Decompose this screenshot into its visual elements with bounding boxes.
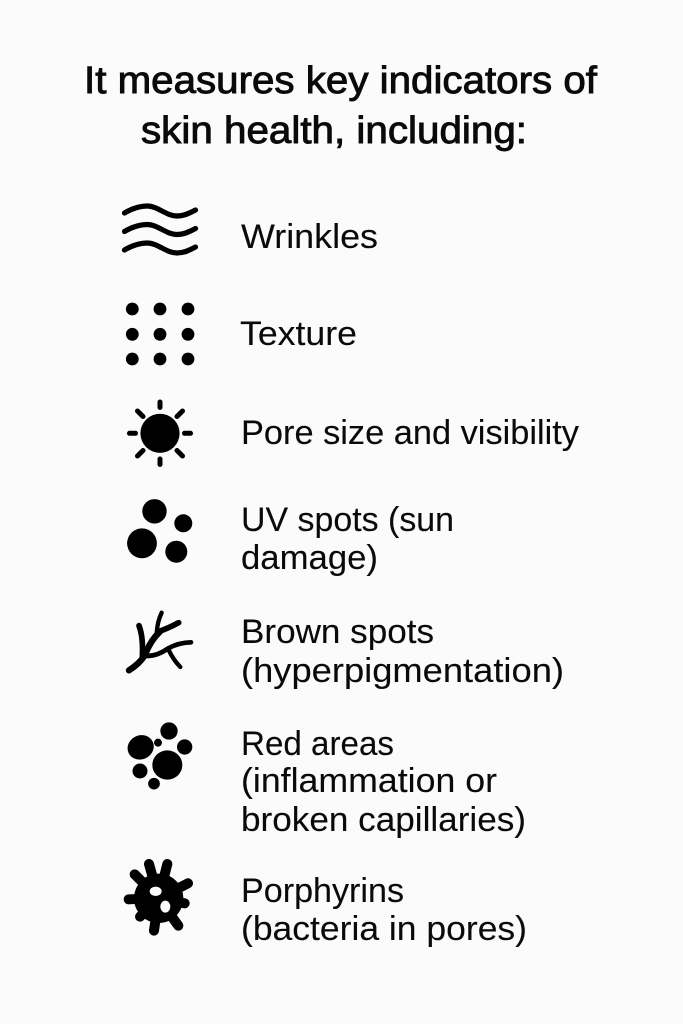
icon: wavy lines bbox=[124, 206, 196, 253]
item: brown spots: (hyperpigmentation) bbox=[241, 652, 564, 690]
item: brown spots bbox=[129, 613, 564, 690]
item: texture bbox=[126, 303, 357, 365]
title: It measures key indicators of bbox=[84, 60, 597, 102]
icon: sun bbox=[130, 402, 190, 464]
item: red areas bbox=[124, 722, 526, 839]
item: wrinkles: Wrinkles bbox=[241, 218, 378, 256]
icon: cluster of blobs bbox=[124, 722, 192, 789]
item: uv spots bbox=[127, 499, 454, 577]
item: pore size bbox=[130, 402, 579, 464]
item: uv spots: damage) bbox=[241, 539, 378, 577]
item: porphyrins bbox=[129, 864, 527, 948]
item: pore size: Pore size and visibility bbox=[241, 414, 579, 452]
title: skin health, including: bbox=[141, 110, 527, 152]
item: porphyrins: Porphyrins bbox=[241, 872, 404, 910]
icon: bacteria bbox=[129, 864, 188, 931]
item: uv spots: UV spots (sun bbox=[241, 501, 454, 539]
item: wrinkles bbox=[124, 206, 378, 256]
icon: branching capillary bbox=[129, 613, 191, 670]
item: red areas: Red areas bbox=[241, 725, 394, 763]
item: red areas: broken capillaries) bbox=[241, 801, 526, 839]
item: red areas: (inflammation or bbox=[241, 762, 497, 800]
item: porphyrins: (bacteria in pores) bbox=[241, 910, 527, 948]
icon: four spots bbox=[127, 499, 192, 563]
title bbox=[84, 60, 597, 152]
item: texture: Texture bbox=[240, 315, 357, 353]
item: brown spots: Brown spots bbox=[241, 613, 434, 651]
icon: dot grid bbox=[126, 303, 194, 365]
